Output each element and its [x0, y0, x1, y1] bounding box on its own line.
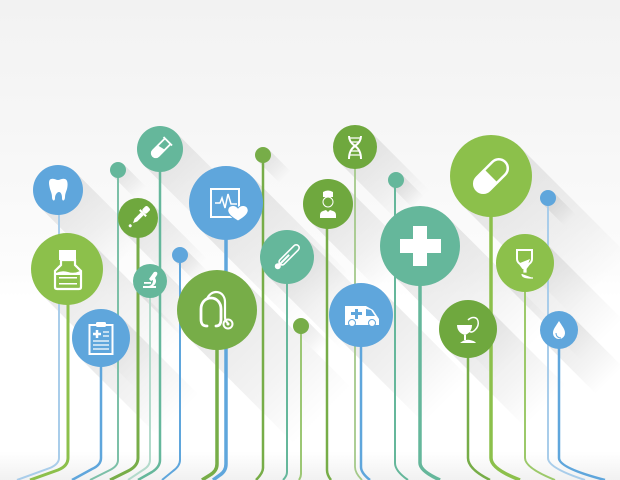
- dot: teal right: [388, 172, 404, 188]
- icon bubble: thermometer: [260, 230, 314, 284]
- icon bubble: medical cross: [380, 206, 460, 286]
- icon bubble: DNA helix: [333, 125, 377, 169]
- icon bubble: stethoscope: [177, 270, 257, 350]
- dot: green lower centre: [293, 318, 309, 334]
- icon bubble: heart monitor: [189, 166, 263, 240]
- dot: teal left: [110, 162, 126, 178]
- icon bubble: pill capsule: [450, 135, 532, 217]
- icon bubble: water drop: [540, 311, 578, 349]
- dot: green top centre: [255, 147, 271, 163]
- icon bubble: tooth: [33, 165, 83, 215]
- icon bubble: clipboard: [72, 309, 130, 367]
- long diagonal shadows: [40, 131, 620, 444]
- stems: [17, 160, 605, 480]
- dot: blue right: [540, 190, 556, 206]
- icon bubble: nurse: [303, 179, 353, 229]
- icon bubble: microscope: [133, 264, 167, 298]
- icon bubble: bowl of hygieia: [439, 300, 497, 358]
- icon bubble: ambulance: [329, 283, 393, 347]
- dot: blue left: [172, 247, 188, 263]
- icon bubble: test tube: [137, 126, 183, 172]
- icon bubble: medicine bottle: [31, 233, 103, 305]
- icon bubble: dropper: [118, 198, 158, 238]
- icon bubble: IV bag: [496, 234, 554, 292]
